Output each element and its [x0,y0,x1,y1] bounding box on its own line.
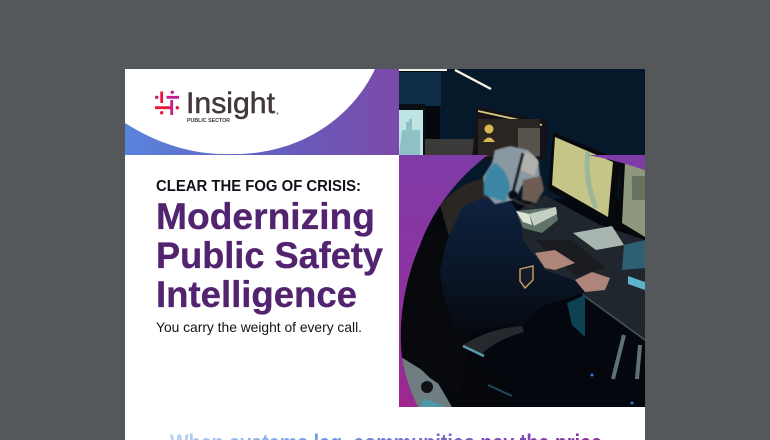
kicker heading: CLEAR THE FOG OF CRISIS: [156,178,361,195]
hair and headset [483,146,544,208]
white page card [125,69,645,440]
desk legs [613,335,640,379]
floor [400,357,452,407]
center monitor [472,106,548,160]
main title: Public Safety [156,235,383,276]
under desk teal [567,295,585,337]
curved desk behind operator [440,178,492,236]
purple panel behind photo [399,155,645,407]
office chair [400,246,512,397]
main title [156,196,383,315]
chair armrest [463,326,524,356]
main title: Modernizing [156,196,375,237]
hands [535,250,610,292]
floor lights [590,374,634,404]
photo: dispatcher in control room [399,69,645,407]
header gradient band with white arc [125,69,400,155]
monitor: map screen [548,132,620,225]
shoulder patch [520,266,533,288]
purple wedge over top right of photo [588,155,645,170]
back wall [440,69,645,199]
logo: Insight Public Sector [155,87,279,124]
monitor: side screen [618,162,645,237]
desk [510,195,645,341]
main title: Intelligence [156,274,357,315]
left monitor [399,104,425,155]
desk papers and cup [573,226,645,290]
logo sub-label: PUBLIC SECTOR [187,118,230,124]
keyboard [535,240,606,277]
icon: Insight mark [155,91,179,115]
open notebook [516,207,558,233]
logo registered mark: ® [276,111,279,116]
subtitle: You carry the weight of every call. [156,319,362,335]
dispatcher body [440,198,586,322]
logo wordmark: Insight [186,87,276,120]
report cover thumbnail [125,69,645,440]
